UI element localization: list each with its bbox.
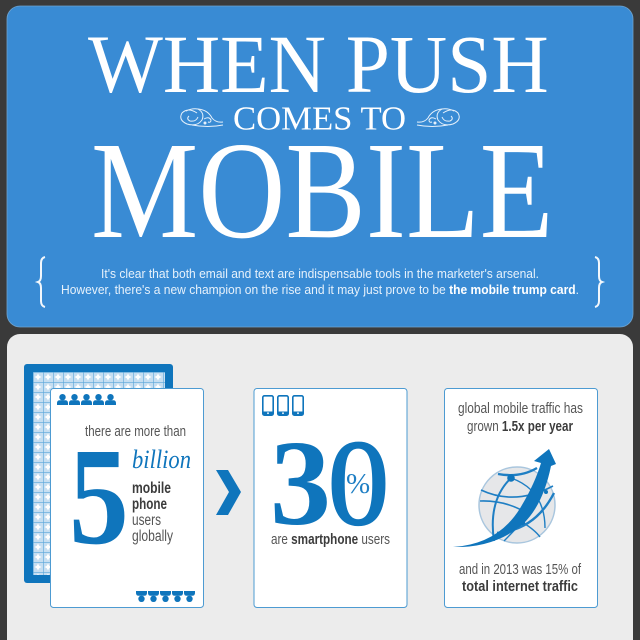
- text: global traffic: global mobile traffic has: [458, 400, 583, 417]
- panel: blue header: [7, 6, 633, 327]
- intro text: [61, 267, 579, 297]
- icon: people row: [57, 394, 116, 405]
- number: 5: 5: [69, 420, 129, 574]
- subtitle: comes to: COMES TO: [233, 100, 406, 137]
- intro text: It's clear that both email and text are indispensable tools in the marketer's arsenal.: [101, 267, 539, 281]
- text: mobile phone users globally: users: [132, 512, 161, 529]
- number: 30: 0: [328, 416, 389, 551]
- text: are smartphone users: are smartphone users: [271, 531, 390, 548]
- text: mobile phone users globally: globally: [132, 528, 173, 545]
- card: mobile traffic: [444, 388, 598, 608]
- text: mobile phone users globally: [132, 480, 173, 545]
- ornament: left flourish: [181, 109, 223, 126]
- title: when push: WHEN PUSH: [88, 18, 549, 110]
- text: there are more than: there are more than: [85, 423, 186, 440]
- icon: smartphones: [263, 396, 303, 415]
- text: global traffic: [458, 400, 583, 435]
- ornament: right flourish: [417, 109, 459, 126]
- text: 2013 share: and in 2013 was 15% of: [459, 561, 582, 578]
- number: 30: 3: [270, 416, 331, 551]
- panel: grey content area: [7, 334, 633, 640]
- text: global traffic: grown 1.5x per year: [467, 418, 573, 435]
- icon: people row inverted: [136, 591, 195, 602]
- title: mobile: MOBILE: [91, 114, 553, 268]
- arrow: chevron: [216, 470, 241, 515]
- symbol: percent: %: [346, 468, 370, 500]
- intro text: However, there's a new champion on the rise and it may just prove to be the mobile trump card.: [61, 283, 579, 297]
- text: mobile phone users globally: phone: [132, 496, 167, 513]
- card: 5 billion: [50, 388, 204, 608]
- text: 2013 share: total internet traffic: [462, 578, 578, 595]
- text: mobile phone users globally: mobile: [132, 480, 171, 497]
- left brace: [38, 257, 45, 307]
- card back: patterned: [24, 364, 173, 583]
- text: 2013 share: [459, 561, 582, 595]
- text: billion: billion: [132, 445, 191, 474]
- icon: globe with arrow: [453, 449, 556, 547]
- right brace: [595, 257, 602, 307]
- card: 30 percent: [254, 388, 407, 608]
